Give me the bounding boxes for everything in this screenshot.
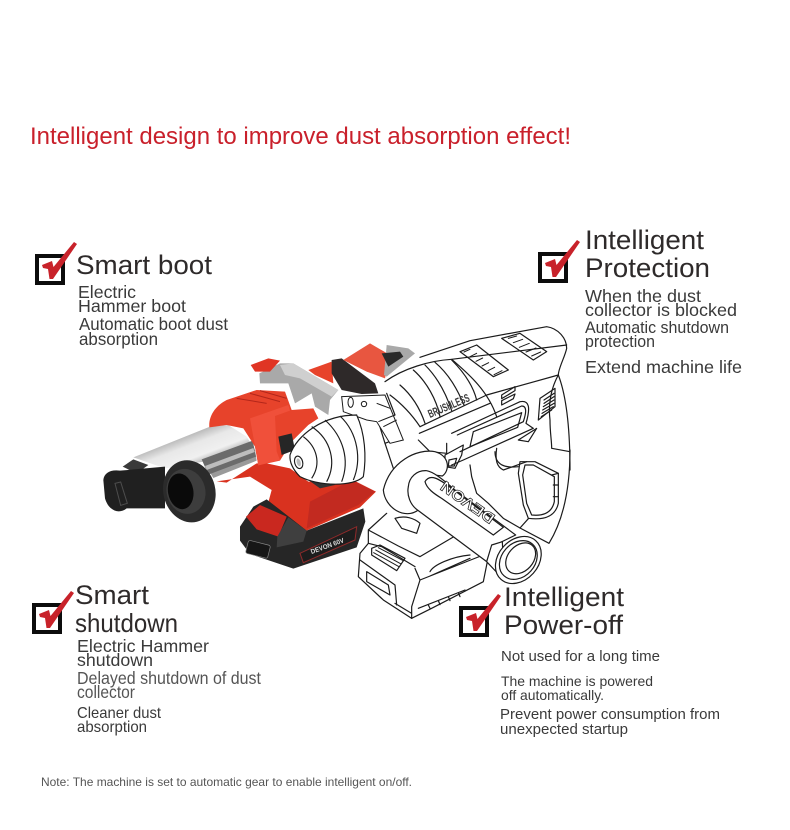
handle label: DEVON bbox=[438, 477, 498, 527]
body label: BRUSHLESS bbox=[426, 392, 472, 421]
tube dark channel bbox=[202, 441, 256, 475]
text block: Electric bbox=[78, 282, 136, 302]
heading: Smart bbox=[75, 580, 150, 610]
line art: upper drill body bbox=[372, 327, 570, 470]
illustration: hammer drill with dust collector bbox=[103, 327, 570, 618]
callout: smart shutdown bbox=[34, 580, 261, 736]
callout: intelligent power-off bbox=[461, 582, 720, 738]
text block bbox=[77, 636, 261, 736]
text block: shutdown bbox=[77, 650, 153, 670]
chuck bbox=[290, 415, 365, 484]
chuck back plate bbox=[342, 395, 403, 443]
heading: shutdown bbox=[75, 608, 178, 638]
text block: Automatic shutdown bbox=[585, 319, 729, 337]
upper red strip bbox=[308, 362, 333, 383]
footnote: Note: The machine is set to automatic gear to enable intelligent on/off. bbox=[41, 775, 412, 789]
silver clamp bbox=[259, 363, 338, 415]
line art: handle and lower drill body bbox=[358, 440, 570, 618]
text block: unexpected startup bbox=[500, 721, 628, 738]
text block: Hammer boot bbox=[78, 296, 186, 316]
red knob bbox=[251, 358, 280, 372]
icon: check box bbox=[461, 594, 501, 635]
heading bbox=[585, 225, 710, 283]
icon: check box bbox=[34, 591, 74, 632]
heading: Protection bbox=[585, 253, 710, 283]
battery bbox=[240, 499, 365, 569]
housing bbox=[209, 390, 318, 465]
text block: off automatically. bbox=[501, 687, 604, 703]
text block: Cleaner dust bbox=[77, 705, 162, 722]
text block: Delayed shutdown of dust bbox=[77, 668, 261, 688]
text block: Automatic boot dust bbox=[79, 314, 228, 334]
dust collector bbox=[103, 425, 376, 569]
text block bbox=[585, 286, 742, 377]
text block: The machine is powered bbox=[501, 673, 653, 689]
text block: Extend machine life bbox=[585, 357, 742, 377]
icon: check box bbox=[540, 240, 580, 281]
text block bbox=[500, 648, 720, 738]
text block: protection bbox=[585, 333, 655, 351]
clamp right side bbox=[384, 345, 415, 377]
callout: smart boot bbox=[37, 242, 228, 349]
suction ring bbox=[157, 455, 222, 528]
title: Intelligent design to improve dust absorption effect! bbox=[30, 123, 571, 150]
dark clamp plate bbox=[332, 358, 378, 394]
text block: Electric Hammer bbox=[77, 636, 209, 656]
battery label: DEVON 60V bbox=[310, 537, 346, 556]
red clamp top bbox=[343, 343, 390, 378]
callout: intelligent protection bbox=[540, 225, 742, 377]
text block: Not used for a long time bbox=[501, 648, 660, 665]
text block: collector bbox=[77, 682, 135, 702]
silver tube bbox=[133, 425, 257, 478]
text block: Prevent power consumption from bbox=[500, 706, 720, 723]
heading: Smart boot bbox=[76, 250, 213, 280]
line art: side handle bbox=[383, 451, 551, 593]
heading bbox=[75, 580, 178, 638]
end cap bbox=[123, 459, 148, 473]
heading: Intelligent bbox=[585, 225, 704, 255]
lower red base bbox=[217, 463, 376, 531]
icon: check box bbox=[37, 242, 77, 283]
heading: Power-off bbox=[504, 610, 624, 640]
text block: collector is blocked bbox=[585, 300, 737, 320]
text block: absorption bbox=[77, 719, 147, 736]
text block: absorption bbox=[79, 329, 158, 349]
heading: Intelligent bbox=[504, 582, 625, 612]
heading bbox=[504, 582, 625, 640]
text block bbox=[78, 282, 228, 349]
text block: When the dust bbox=[585, 286, 701, 306]
red housing and clamp bbox=[209, 343, 415, 484]
